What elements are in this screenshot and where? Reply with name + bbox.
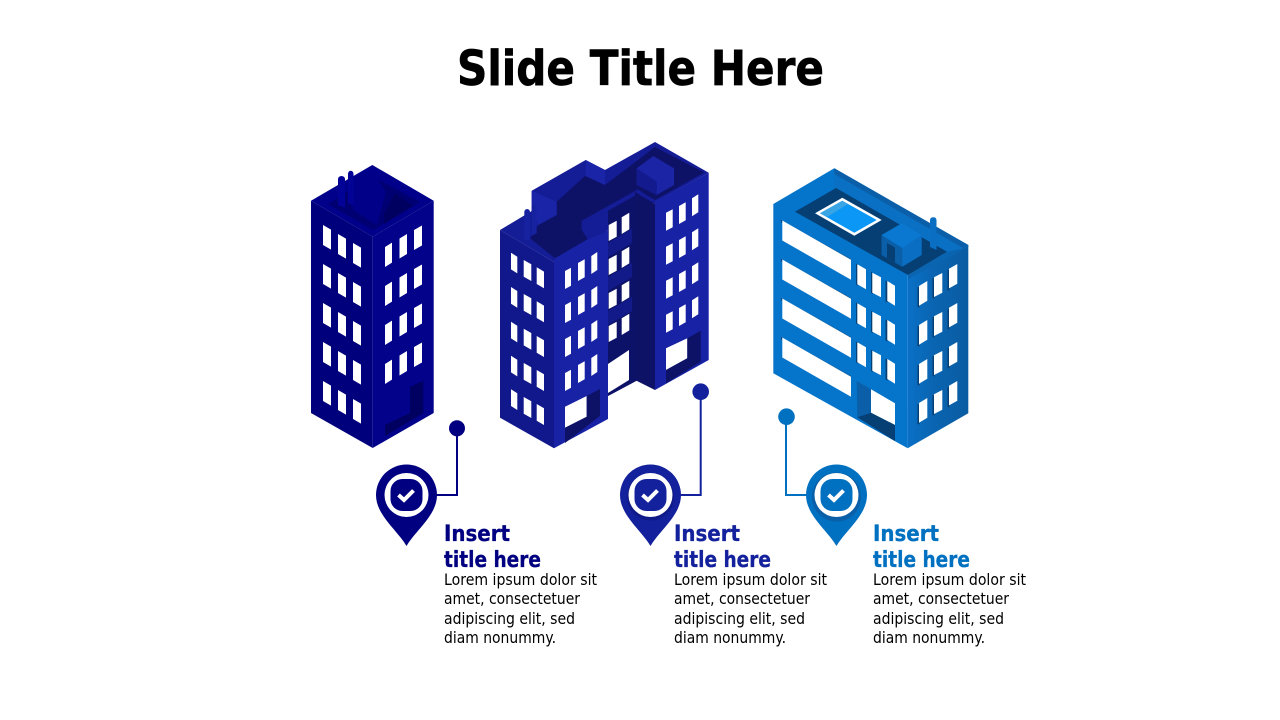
middle door [608, 350, 629, 393]
wide windows [782, 220, 851, 397]
connector 1 [436, 420, 465, 495]
door [385, 381, 423, 436]
right parapet inner [908, 245, 968, 279]
roof shadow patch [384, 193, 413, 224]
rounded square [820, 479, 852, 511]
left tower left windows [511, 253, 544, 425]
small windows [857, 264, 895, 384]
check mark [642, 490, 658, 500]
roof box side [637, 168, 657, 195]
pin body [376, 464, 437, 546]
roof box left side [882, 235, 902, 267]
body 3: adipiscing elit, sed [873, 609, 1004, 628]
left tower right face [554, 230, 608, 448]
right face [908, 245, 968, 448]
door opening [871, 389, 895, 425]
left tower chimneys [524, 204, 537, 240]
right windows [919, 264, 957, 423]
door floor [857, 413, 895, 441]
rear rim [834, 168, 968, 248]
connector line [436, 428, 457, 495]
roof box top [882, 223, 922, 248]
chimneys [338, 171, 354, 208]
body 3: Lorem ipsum dolor sit [873, 570, 1026, 589]
roof box door [887, 243, 895, 262]
text block 2 [674, 522, 827, 647]
pool water [820, 201, 877, 233]
right tower windows [666, 194, 698, 333]
rear parapet wall [834, 168, 968, 275]
heading 2: Insert [674, 522, 740, 547]
pool [815, 198, 882, 236]
title: Slide Title Here [457, 41, 824, 97]
roof surface [795, 188, 947, 275]
body 2: Lorem ipsum dolor sit [674, 570, 827, 589]
right tower door recess [666, 331, 701, 383]
right tower right face [655, 173, 709, 390]
pin body [806, 464, 867, 546]
building 3: light blue office [773, 168, 968, 448]
body 1: diam nonummy. [444, 628, 556, 647]
roof surface [328, 176, 420, 230]
white ring [628, 473, 672, 517]
building 1: navy tower [311, 165, 434, 448]
parapet inner faces [532, 160, 605, 225]
body 2: adipiscing elit, sed [674, 609, 805, 628]
rounded square [634, 479, 666, 511]
roof parapet [311, 165, 434, 237]
roof plant box [353, 170, 386, 225]
pool border [815, 198, 882, 236]
heading 3: Insert [873, 522, 939, 547]
middle windows [609, 213, 629, 342]
pin icon 2 [620, 464, 681, 546]
left face [311, 201, 373, 448]
pin icon 1 [376, 464, 437, 546]
body 2: amet, consectetuer [674, 589, 810, 608]
white ring [814, 473, 858, 517]
body 1: amet, consectetuer [444, 589, 580, 608]
connector line [680, 392, 701, 495]
left windows [323, 225, 361, 424]
pool shade [820, 201, 848, 217]
right windows [385, 226, 422, 384]
middle wall blue bands [608, 229, 632, 325]
left face and parapet [773, 168, 908, 448]
body 1: adipiscing elit, sed [444, 609, 575, 628]
right window shadows [918, 270, 950, 424]
ring shadow [627, 474, 674, 520]
roof surface [530, 147, 704, 258]
left tower door recess [565, 389, 600, 443]
middle door sill [608, 380, 632, 396]
right face [373, 201, 434, 448]
roof box [882, 223, 922, 267]
left tower right windows [565, 252, 597, 391]
connector line [786, 417, 808, 495]
heading 2: title here [674, 548, 771, 573]
connector dot [449, 420, 465, 436]
body 1: Lorem ipsum dolor sit [444, 570, 597, 589]
text block 3 [873, 522, 1026, 647]
heading 1: Insert [444, 522, 510, 547]
roof box [637, 156, 674, 195]
connector 2 [680, 383, 709, 495]
building 2: blue twin tower [500, 142, 709, 448]
left tower door [565, 396, 587, 428]
ring shadow [812, 472, 861, 522]
recess dark wall [635, 192, 655, 390]
middle section wall [608, 190, 638, 396]
text block 1 [444, 522, 597, 647]
connector 3 [778, 408, 808, 495]
white ring [384, 473, 428, 517]
body 2: diam nonummy. [674, 628, 786, 647]
connector dot [778, 408, 795, 425]
pin body [620, 464, 681, 546]
body 3: amet, consectetuer [873, 589, 1009, 608]
middle top ledge [582, 189, 655, 242]
rear silhouette and parapet [500, 142, 709, 262]
wide window shadows [781, 220, 851, 378]
pin icon 3 [806, 464, 867, 546]
heading 1: title here [444, 548, 541, 573]
body 3: diam nonummy. [873, 628, 985, 647]
right tower door [666, 338, 687, 370]
small window shadows [856, 264, 888, 380]
left tower front parapet band [554, 232, 608, 266]
connector dot [692, 383, 709, 400]
rounded square [390, 479, 422, 511]
check mark [398, 490, 414, 500]
heading 3: title here [873, 548, 970, 573]
check mark [828, 490, 844, 500]
left tower left face [500, 230, 554, 448]
door wall [857, 381, 871, 417]
chimney [930, 217, 936, 250]
